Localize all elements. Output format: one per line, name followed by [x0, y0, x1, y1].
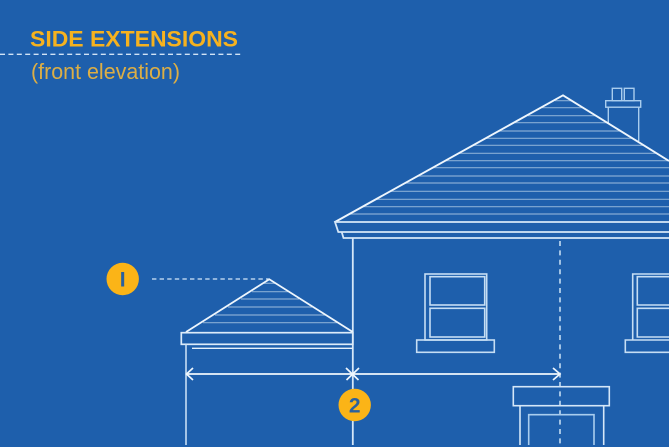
- dimension arrows: [186, 368, 560, 380]
- side extension fascia: [181, 333, 353, 344]
- porch: [513, 387, 609, 445]
- side extension roof shingle lines: [203, 283, 337, 323]
- centre dashed line: [559, 241, 561, 445]
- callout 2 badge: [338, 389, 371, 421]
- callout 1 badge: [106, 263, 139, 295]
- title dashed rule: [0, 53, 242, 55]
- main house left wall: [352, 238, 354, 445]
- subtitle: (front elevation): [31, 59, 180, 84]
- title: SIDE EXTENSIONS: [30, 26, 238, 52]
- side extension left wall: [185, 344, 187, 445]
- window left: [417, 274, 494, 352]
- main house fascia and gutter: [335, 222, 669, 238]
- callout 1 badge: I: [120, 268, 126, 292]
- side extension soffit line: [192, 347, 353, 349]
- chimney: [606, 88, 641, 141]
- window right: [625, 274, 669, 352]
- side extension roof outline: [186, 279, 353, 332]
- callout 2 badge: 2: [349, 394, 361, 418]
- main house roof outline: [335, 95, 669, 222]
- callout 1 leader: [152, 278, 269, 280]
- main house roof shingle lines: [350, 101, 669, 214]
